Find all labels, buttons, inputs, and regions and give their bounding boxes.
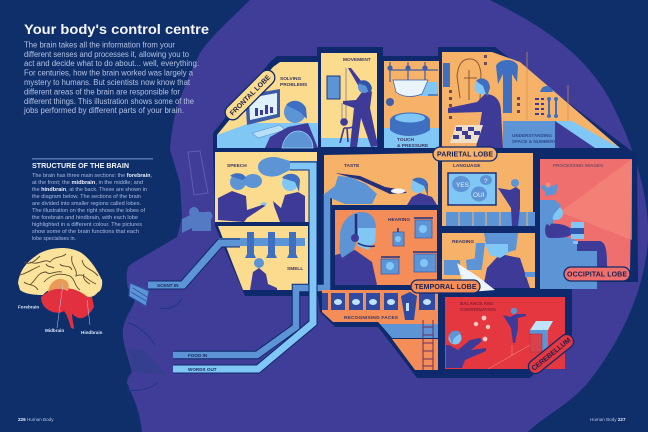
- panel: occipital: [540, 159, 632, 289]
- panel: solving problems: PROBLEMS: [280, 82, 308, 88]
- navy brain outline: [213, 47, 638, 378]
- panel: touch and pressure: [384, 61, 439, 149]
- panel: recognising faces: RECOGNISING FACES: [344, 315, 399, 321]
- structure text: The brain has three main sections: the forebrain,: [32, 173, 152, 179]
- panel: language: [442, 153, 535, 226]
- brain diagram: Forebrain: [18, 304, 39, 310]
- panel: speech: SPEECH: [227, 163, 247, 169]
- pipe: words out: [173, 166, 313, 372]
- structure text: the forebrain and hindbrain, with each lobe: [32, 215, 138, 221]
- panel: cerebellum: COORDINATION: [460, 307, 496, 312]
- pipe: words out: WORDS OUT: [188, 367, 217, 372]
- label: frontal lobe: [222, 67, 278, 123]
- intro text: For centuries, how the brain worked was largely a: [24, 68, 194, 78]
- intro text: act and decide what to do about... well, everything.: [24, 59, 199, 68]
- label: frontal lobe: FRONTAL LOBE: [229, 74, 273, 117]
- structure text: the diagram below. The sections of the brain: [32, 194, 141, 200]
- structure text: are divided into smaller regions called lobes.: [32, 201, 141, 207]
- intro text: jobs performed by different parts of your brain.: [23, 106, 184, 115]
- brain diagram: [18, 248, 103, 335]
- panel: cerebellum: BALANCE AND: [460, 301, 494, 306]
- footer left: 226 Human Body: [18, 417, 54, 422]
- panel: touch and pressure: TOUCH: [397, 137, 415, 143]
- panel: solving problems: [217, 62, 318, 148]
- panel: speech: [215, 152, 317, 222]
- footer right: Human Body 227: [590, 417, 626, 422]
- panel: taste: TASTE: [344, 163, 360, 169]
- panel: reading: READING: [452, 239, 474, 245]
- brain diagram: Hindbrain: [81, 330, 103, 335]
- pipe: scent in: [129, 243, 240, 306]
- panel: smell: [218, 226, 308, 290]
- panel: movement: [321, 53, 378, 147]
- panel: language: ?: [484, 178, 488, 185]
- panel: recognising faces: [322, 290, 438, 370]
- pipe: scent in: SCENT IN: [157, 283, 179, 288]
- label: cerebellum: [526, 332, 576, 376]
- label: temporal lobe: TEMPORAL LOBE: [414, 284, 477, 291]
- structure text: The illustration on the right shows the lobes of: [32, 208, 146, 214]
- panel: smell: SMELL: [287, 266, 303, 272]
- panel: language: LANGUAGE: [453, 163, 481, 169]
- label: occipital lobe: OCCIPITAL LOBE: [567, 272, 627, 278]
- icon: film camera ghost: [182, 151, 212, 233]
- intro text: different things. This illustration shows some of the: [24, 97, 195, 106]
- panel: hearing: HEARING: [388, 217, 410, 223]
- structure text: lobe specialises in.: [32, 236, 76, 242]
- structure text: show some of the brain functions that each: [32, 229, 139, 235]
- structure heading: STRUCTURE OF THE BRAIN: [32, 163, 129, 170]
- panel: parietal: UNDERSTANDING: [512, 133, 552, 138]
- panel: parietal: SPACE & NUMBERS: [512, 139, 557, 144]
- panel: reading: [442, 233, 535, 292]
- panel: hearing: [335, 210, 437, 285]
- structure text: at the front; the midbrain , in the middle; and: [32, 180, 143, 186]
- brain diagram: Midbrain: [45, 328, 64, 333]
- label: temporal lobe: [411, 280, 480, 293]
- panel: language: OUI: [473, 192, 485, 199]
- pipe: food in: FOOD IN: [188, 353, 208, 358]
- label: parietal lobe: PARIETAL LOBE: [437, 152, 493, 158]
- panel: taste: [323, 153, 438, 205]
- panel: solving problems: SOLVING: [280, 76, 302, 82]
- face creases: [127, 298, 182, 391]
- panel: movement: MOVEMENT: [343, 57, 371, 63]
- structure text: highlighted in a different colour. The pictures: [32, 222, 142, 228]
- label: cerebellum: CEREBELLUM: [531, 337, 573, 373]
- panel: language: YES: [456, 182, 470, 189]
- title: Your body's control centre: [24, 21, 209, 37]
- panel: cerebellum: [445, 297, 565, 369]
- structure text: the hindbrain , at the back. These are shown in: [32, 187, 147, 193]
- intro text: The brain takes all the information from your: [24, 40, 175, 50]
- intro text: mystery to humans. But scientists now know that: [24, 78, 191, 87]
- panel: occipital: PROCESSING IMAGES: [553, 163, 603, 168]
- pipe: food in: [173, 195, 327, 358]
- face shading: [128, 348, 167, 375]
- intro text: different areas of the brain are responsible for: [24, 88, 180, 96]
- intro text: [23, 40, 199, 115]
- panel: parietal: [442, 52, 620, 148]
- structure text: [32, 173, 152, 242]
- panel: touch and pressure: & PRESSURE: [397, 143, 429, 149]
- intro text: different senses and processes it, allowing you to: [24, 50, 190, 59]
- label: occipital lobe: [564, 267, 630, 281]
- label: parietal lobe: [433, 147, 497, 161]
